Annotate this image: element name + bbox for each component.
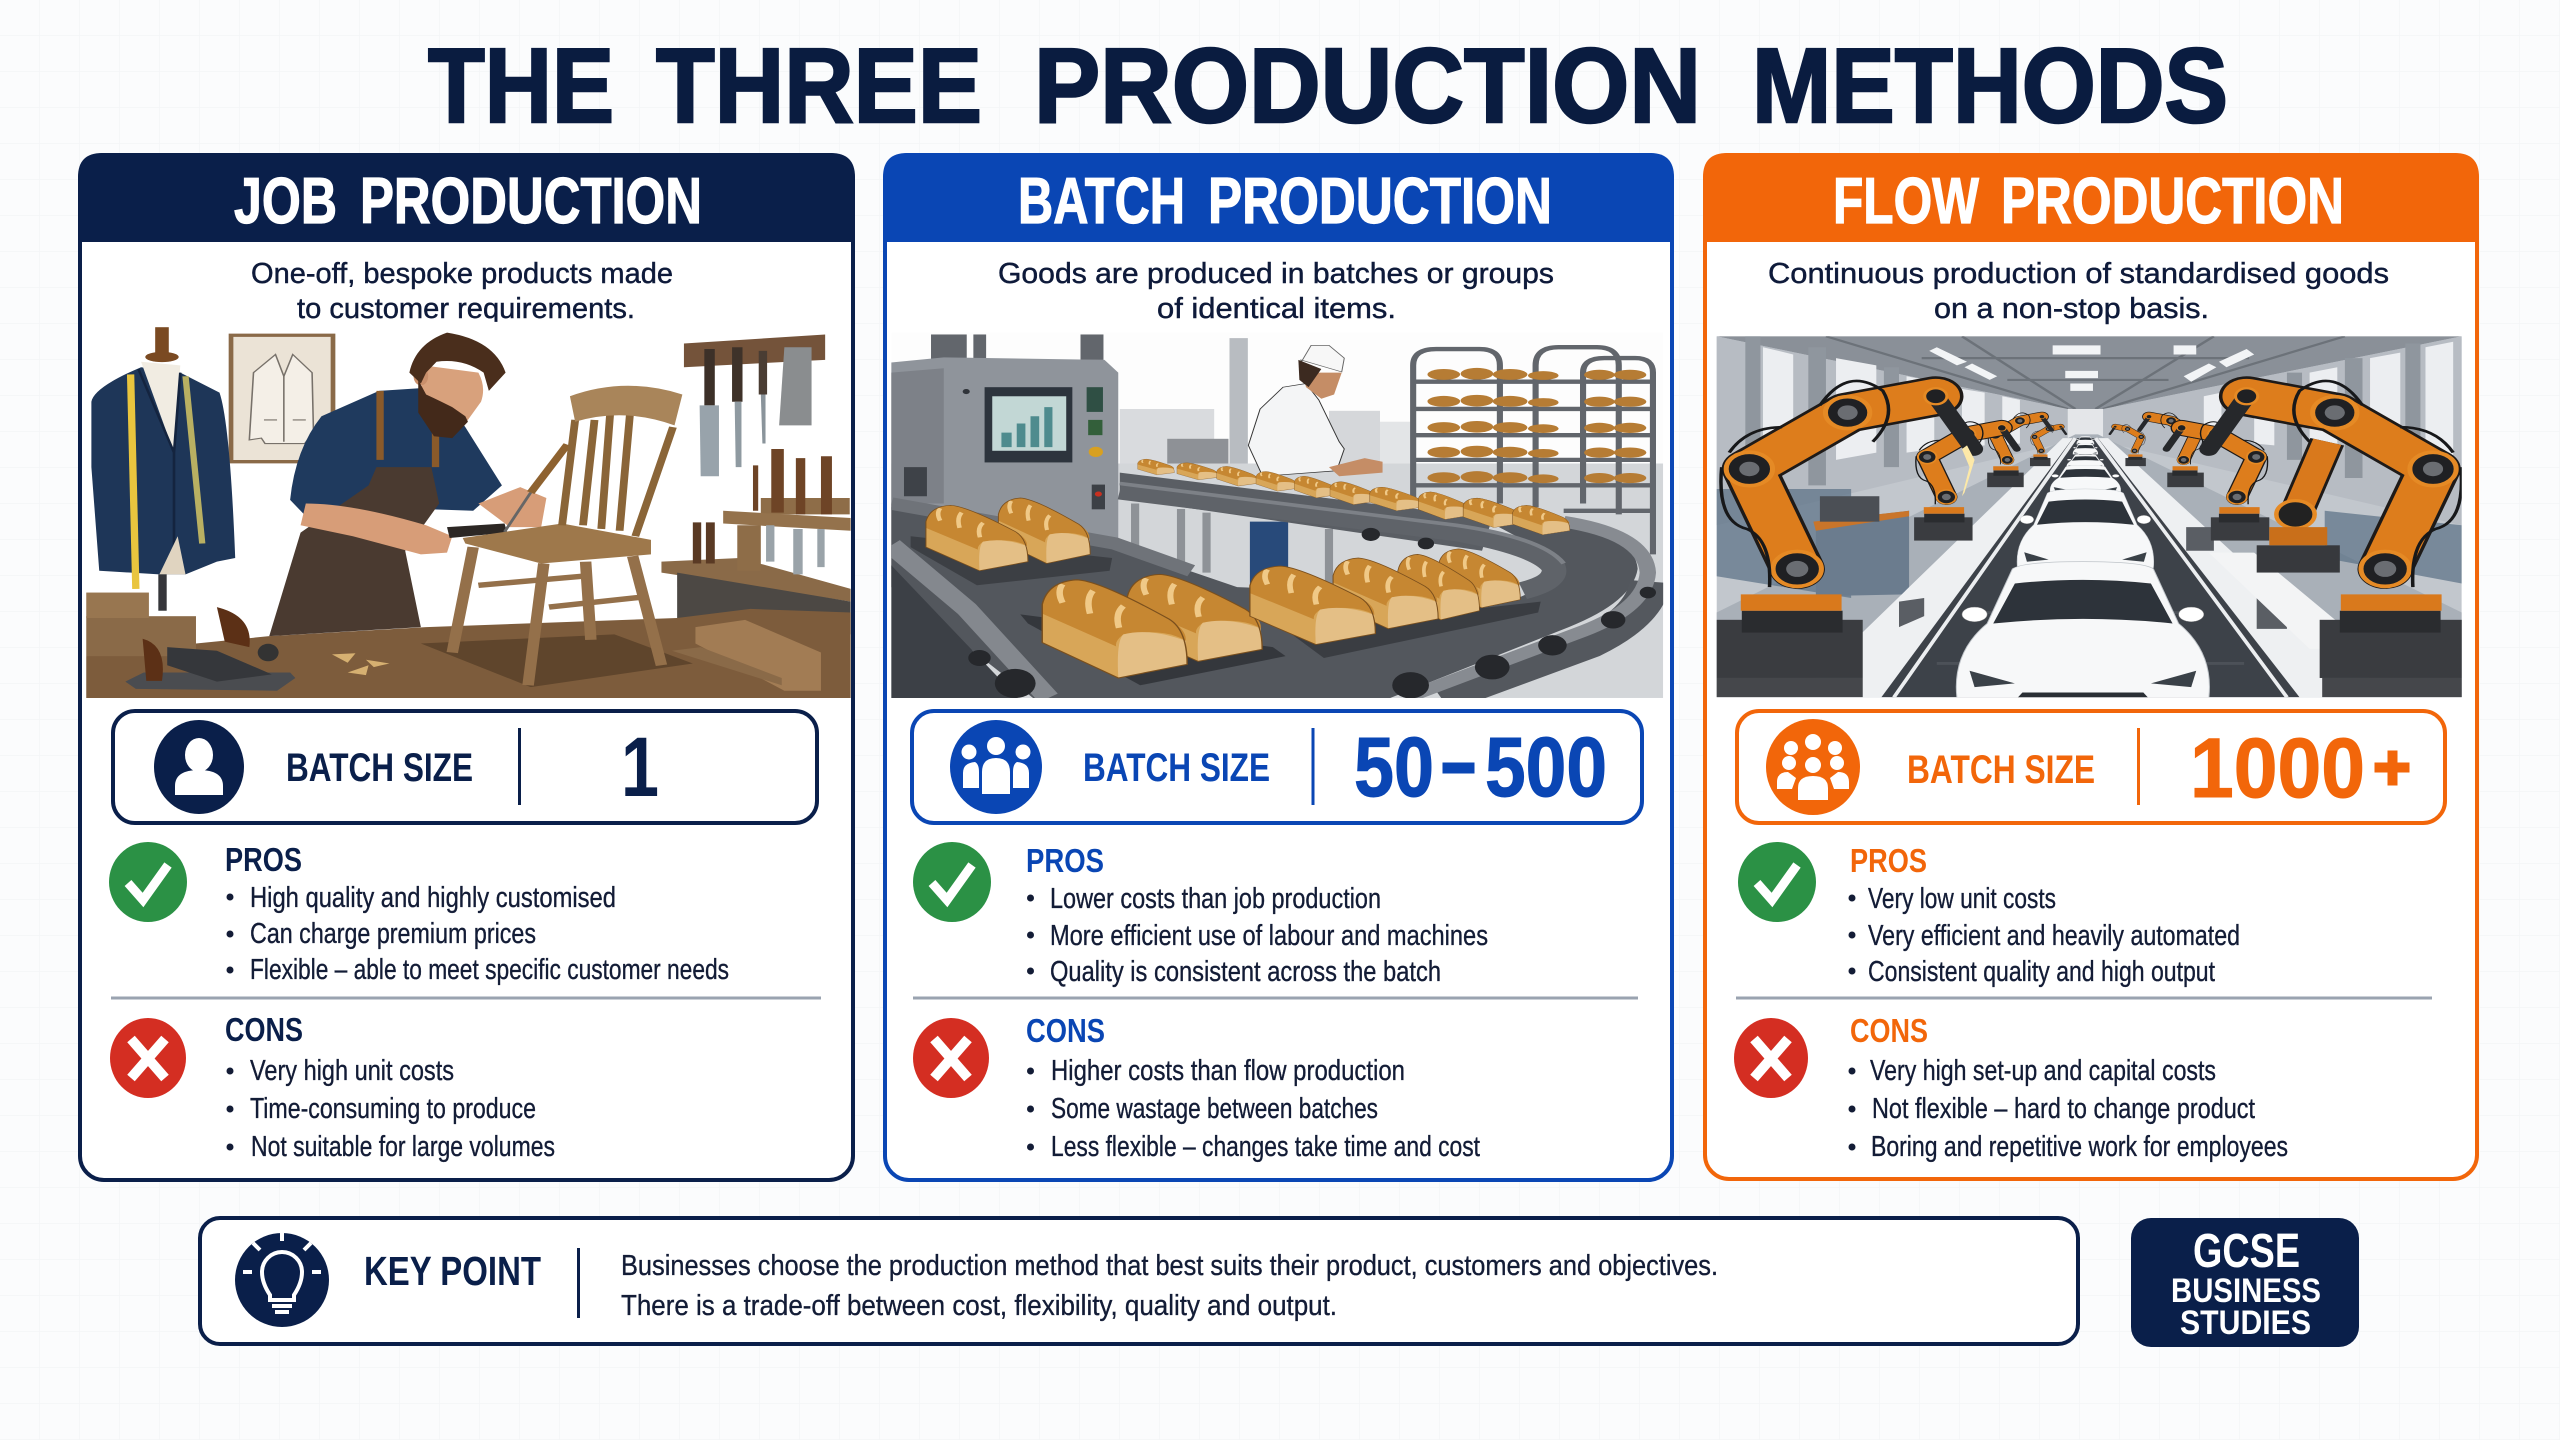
callout: key point xyxy=(200,1218,2078,1344)
cons list xyxy=(225,1011,555,1163)
icon: red cross xyxy=(913,1018,989,1098)
pros list: PROS xyxy=(1026,842,1104,879)
pros list: PROS xyxy=(1850,842,1927,879)
illustration: bakery conveyor with loaves xyxy=(891,333,1663,698)
badge: GCSE Business Studies: BUSINESS xyxy=(2171,1272,2321,1310)
cons list: Higher costs than flow production xyxy=(1051,1055,1405,1087)
title: THE xyxy=(428,27,614,145)
batch size box xyxy=(912,711,1642,823)
trays of loaves xyxy=(926,498,1520,678)
badge: GCSE Business Studies: GCSE xyxy=(2193,1225,2300,1278)
pros list: Very low unit costs xyxy=(1868,883,2056,915)
flow heading: PRODUCTION xyxy=(2001,164,2344,237)
batch description: Goods are produced in batches or groups xyxy=(998,258,1554,290)
cons list: Not flexible – hard to change product xyxy=(1872,1093,2255,1125)
key point text xyxy=(621,1250,1718,1322)
cons list: Not suitable for large volumes xyxy=(251,1131,555,1163)
front robots xyxy=(1717,381,2466,697)
flow heading xyxy=(1833,164,2344,237)
mannequin with jacket xyxy=(91,327,235,611)
assembly track xyxy=(1862,438,2335,698)
cons list: Very high set-up and capital costs xyxy=(1870,1055,2216,1087)
batch description: of identical items. xyxy=(1157,293,1396,325)
pros list: Lower costs than job production xyxy=(1050,883,1381,915)
batch size value: 1000 xyxy=(2190,721,2365,815)
cons list: Some wastage between batches xyxy=(1051,1093,1378,1125)
cons list xyxy=(1026,1012,1480,1163)
job heading: PRODUCTION xyxy=(360,164,702,237)
flow heading: FLOW xyxy=(1833,164,1979,237)
panel: flow production xyxy=(1703,153,2479,1179)
key point text: Businesses choose the production method that best suits their product, customers and objectives. xyxy=(621,1250,1718,1282)
cons list: Time-consuming to produce xyxy=(250,1093,536,1125)
pros list xyxy=(225,841,729,986)
cars on line xyxy=(1956,436,2209,698)
batch heading: BATCH xyxy=(1018,164,1185,237)
job description: One-off, bespoke products made xyxy=(251,258,673,290)
batch size box xyxy=(113,711,817,823)
pros list: More efficient use of labour and machines xyxy=(1050,920,1488,952)
illustration: craftsman carving a wooden chair xyxy=(86,322,851,698)
cons list: CONS xyxy=(1026,1012,1105,1049)
pros list xyxy=(1026,842,1488,988)
cons list xyxy=(1848,1012,2288,1163)
icon: single person xyxy=(154,720,244,814)
badge: GCSE Business Studies: STUDIES xyxy=(2180,1304,2311,1342)
chair xyxy=(452,386,682,685)
badge: GCSE Business Studies xyxy=(2131,1218,2359,1347)
batch heading xyxy=(1018,164,1552,237)
craftsman xyxy=(269,333,567,636)
flow description: Continuous production of standardised goods xyxy=(1768,258,2389,290)
title: PRODUCTION xyxy=(1034,27,1701,145)
batch size label: BATCH SIZE xyxy=(1083,746,1270,790)
machine xyxy=(891,334,1118,569)
batch size value: 500 xyxy=(1485,720,1607,814)
pros list: PROS xyxy=(225,841,302,878)
key point text: There is a trade-off between cost, flexibility, quality and output. xyxy=(621,1290,1337,1322)
batch heading: PRODUCTION xyxy=(1208,164,1552,237)
batch size box xyxy=(1737,711,2445,823)
illustration: automated car assembly line xyxy=(1717,336,2466,698)
title: THREE xyxy=(656,27,982,145)
icon: red cross xyxy=(1734,1018,1808,1098)
job header band xyxy=(78,153,855,242)
factory hall background xyxy=(1717,336,2462,697)
batch size value: 1 xyxy=(621,720,659,814)
batch size label: BATCH SIZE xyxy=(286,746,473,790)
flow description xyxy=(1768,258,2389,325)
batch size value: 50 xyxy=(1354,720,1434,814)
pros list xyxy=(1848,842,2240,988)
cons list: Less flexible – changes take time and cost xyxy=(1051,1131,1480,1163)
title xyxy=(428,27,2228,145)
icon: light bulb xyxy=(235,1231,329,1327)
cons list: CONS xyxy=(1850,1012,1928,1049)
title: METHODS xyxy=(1752,27,2228,145)
cons list: Very high unit costs xyxy=(250,1055,454,1087)
loaves on upper belt xyxy=(1138,459,1570,535)
hand plane xyxy=(125,607,295,691)
pros list: Consistent quality and high output xyxy=(1868,956,2215,988)
icon: green tick xyxy=(109,842,187,922)
cons list: CONS xyxy=(225,1011,303,1048)
icon: green tick xyxy=(1738,842,1816,922)
cons list: Boring and repetitive work for employees xyxy=(1871,1131,2288,1163)
panel: job production xyxy=(78,153,855,1180)
batch size label: BATCH SIZE xyxy=(1907,748,2095,792)
job heading: JOB xyxy=(234,164,337,237)
racks xyxy=(1413,347,1653,554)
conveyors xyxy=(891,473,1656,698)
pros list: High quality and highly customised xyxy=(250,882,616,914)
batch header band xyxy=(883,153,1674,242)
pros list: Can charge premium prices xyxy=(250,918,536,950)
flow header band xyxy=(1703,153,2479,242)
batch description xyxy=(998,258,1554,325)
panel: batch production xyxy=(883,153,1674,1180)
distant robots xyxy=(1914,413,2269,541)
icon: green tick xyxy=(913,842,991,922)
key point heading: KEY POINT xyxy=(364,1248,541,1294)
icon: red cross xyxy=(110,1018,186,1098)
job description xyxy=(251,258,673,325)
pros list: Very efficient and heavily automated xyxy=(1868,920,2240,952)
batch size value xyxy=(1354,720,1607,814)
icon: crowd of people xyxy=(1766,719,1860,815)
job description: to customer requirements. xyxy=(297,293,635,325)
flow description: on a non-stop basis. xyxy=(1934,293,2209,325)
pros list: Quality is consistent across the batch xyxy=(1050,956,1441,988)
job heading xyxy=(234,164,702,237)
icon: group of people xyxy=(950,720,1042,814)
baker xyxy=(1248,345,1383,585)
pros list: Flexible – able to meet specific customer needs xyxy=(250,954,729,986)
